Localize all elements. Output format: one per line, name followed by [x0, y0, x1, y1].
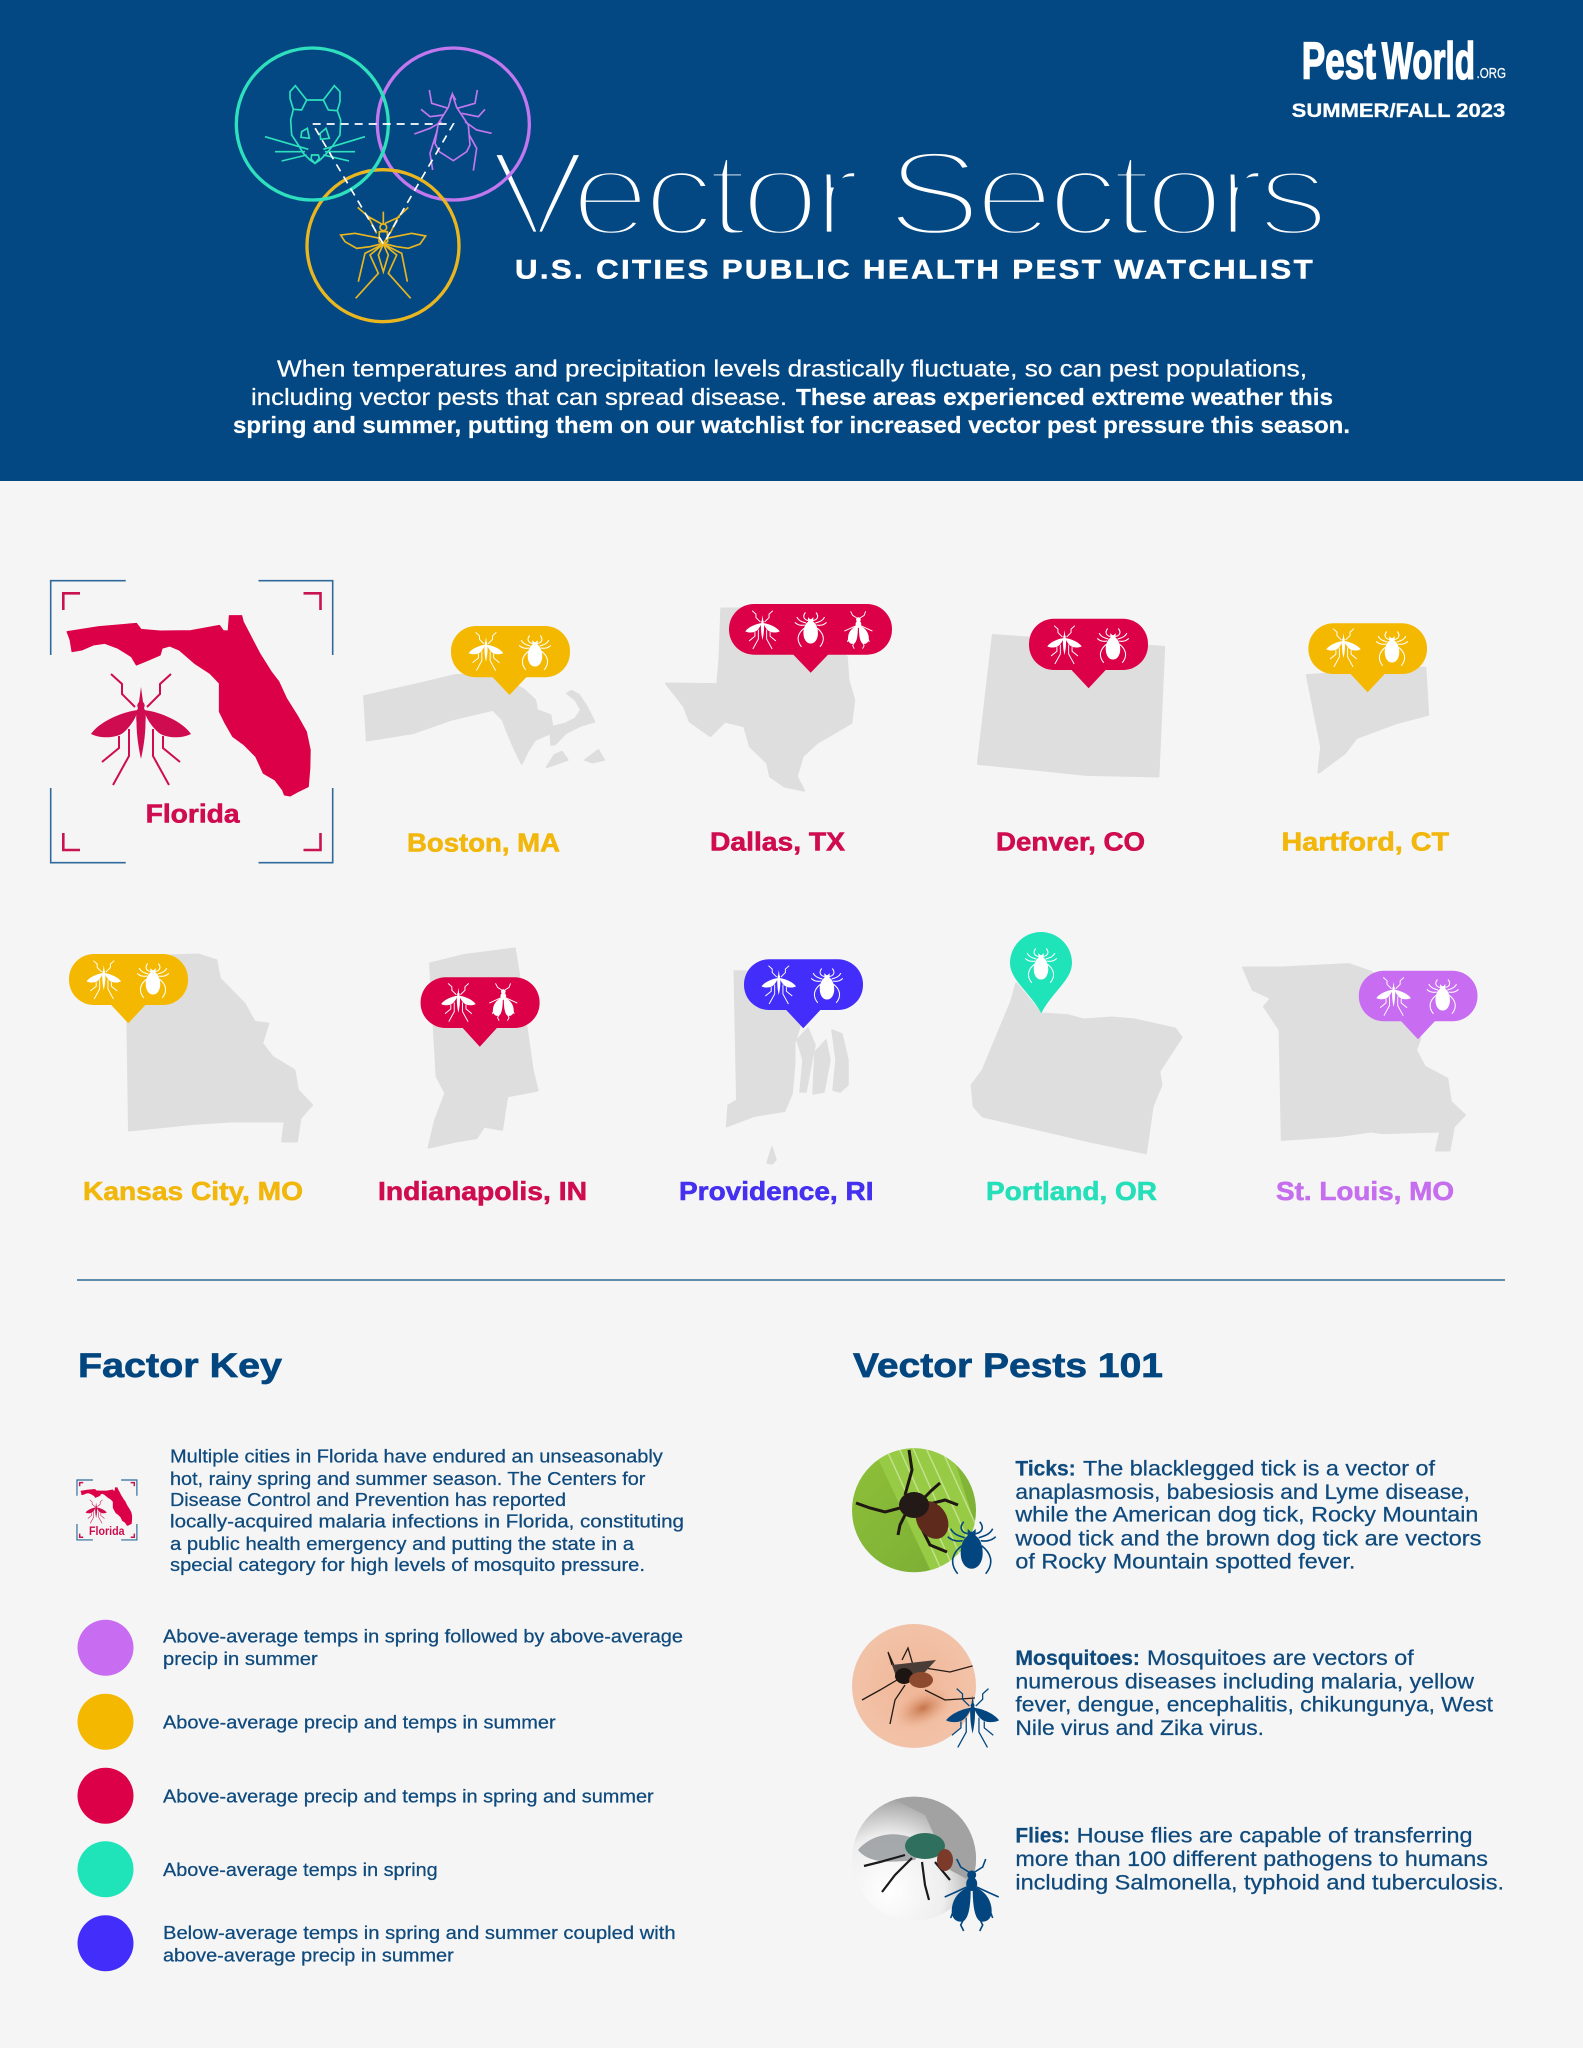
city: Portland	[972, 932, 1181, 1206]
city: Boston	[364, 626, 604, 858]
icon: mosquito	[91, 674, 191, 785]
city: Hartford	[1282, 623, 1449, 857]
legend: red factor	[78, 1768, 654, 1824]
text: Florida explanation: hot, rainy spring and summer season. The Centers for	[170, 1469, 645, 1489]
legend: purple factor: Above-average temps in spring followed by above-average	[163, 1627, 683, 1647]
label: St. Louis: St. Louis, MO	[1276, 1176, 1454, 1206]
legend: purple factor	[78, 1620, 683, 1676]
label: Denver: Denver, CO	[996, 827, 1145, 857]
legend: yellow factor	[78, 1694, 556, 1750]
icon: mini Florida badge: Florida	[89, 1524, 125, 1538]
label: Hartford: Hartford, CT	[1282, 827, 1449, 857]
icon: rodent line art	[265, 86, 365, 163]
label: Indianapolis: Indianapolis, IN	[378, 1176, 587, 1206]
text: Florida explanation: locally-acquired malaria infections in Florida, constituting	[170, 1512, 684, 1532]
icon: three vector circles	[236, 48, 529, 322]
map: Indiana	[429, 948, 537, 1148]
intro paragraph: These areas experienced extreme weather this	[796, 384, 1333, 410]
legend: blue factor: Below-average temps in spring and summer coupled with	[163, 1923, 676, 1943]
text: Florida explanation	[170, 1447, 684, 1575]
text: Florida explanation: Multiple cities in Florida have endured an unseasonably	[170, 1447, 663, 1467]
logo: PestWorld.org: Pest	[1302, 32, 1376, 90]
panel: mosquitoes	[850, 1622, 1493, 1750]
text: flies: Flies:	[1015, 1825, 1070, 1848]
text: ticks: anaplasmosis, babesiosis and Lyme disease,	[1015, 1481, 1470, 1504]
pin: red mosquito and tick	[1029, 619, 1148, 688]
pin: red mosquito and fly	[421, 977, 540, 1047]
city: Providence	[679, 959, 874, 1206]
text: flies	[1015, 1825, 1504, 1894]
text: ticks	[1014, 1458, 1481, 1573]
panel: Florida highlight	[51, 581, 333, 863]
city: Dallas	[666, 604, 892, 857]
legend: red factor: Above-average precip and temps in spring and summer	[163, 1786, 654, 1806]
label: Dallas: Dallas, TX	[710, 827, 846, 857]
frame corners	[51, 581, 333, 863]
intro paragraph: When temperatures and precipitation levels drastically fluctuate, so can pest populations,	[277, 356, 1307, 382]
logo: PestWorld.org: .ORG	[1476, 65, 1506, 82]
icon: mini Florida badge	[77, 1480, 137, 1540]
heading: Vector Pests 101: Vector Pests 101	[853, 1347, 1163, 1385]
text: mosquitoes: Mosquitoes:	[1015, 1647, 1140, 1670]
text: flies: more than 100 different pathogens to humans	[1015, 1848, 1488, 1871]
text: flies: House flies are capable of transferring	[1077, 1825, 1473, 1848]
legend: purple factor: precip in summer	[163, 1649, 318, 1669]
city: St. Louis	[1243, 964, 1478, 1206]
icon: tick	[948, 1522, 996, 1574]
label: Providence: Providence, RI	[679, 1176, 874, 1206]
text: mosquitoes: Nile virus and Zika virus.	[1015, 1717, 1264, 1740]
text: mosquitoes: fever, dengue, encephalitis, chikungunya, West	[1015, 1694, 1493, 1717]
photo: tick on leaf	[852, 1448, 976, 1572]
title: Vector Sectors	[490, 125, 1325, 261]
label: Boston: Boston, MA	[407, 828, 560, 858]
text: ticks: Ticks:	[1015, 1458, 1076, 1481]
map: Missouri	[127, 954, 312, 1142]
map: Florida	[67, 616, 310, 796]
edition date: SUMMER/FALL 2023	[1292, 100, 1505, 122]
pin: yellow mosquito and tick	[451, 626, 570, 695]
label: Kansas City: Kansas City, MO	[83, 1176, 303, 1206]
map: Missouri	[1243, 964, 1465, 1151]
logo: PestWorld.org	[1302, 32, 1506, 90]
pin: blue mosquito and tick	[744, 959, 863, 1028]
intro paragraph: spring and summer, putting them on our watchlist for increased vector pest pressure this season.	[233, 412, 1350, 438]
icon: fly	[945, 1859, 999, 1931]
legend: teal factor	[78, 1841, 438, 1897]
text: mosquitoes	[1015, 1647, 1493, 1740]
pin: red mosquito, tick and fly	[729, 604, 892, 673]
map: Connecticut	[1307, 667, 1428, 773]
text: ticks: The blacklegged tick is a vector of	[1083, 1458, 1435, 1481]
intro paragraph	[233, 356, 1350, 438]
text: Florida explanation: a public health emergency and putting the state in a	[170, 1534, 635, 1554]
text: ticks: of Rocky Mountain spotted fever.	[1015, 1550, 1355, 1573]
logo: PestWorld.org: World	[1382, 32, 1475, 90]
map: Colorado	[978, 635, 1164, 777]
text: flies: including Salmonella, typhoid and tuberculosis.	[1015, 1871, 1504, 1894]
city: Indianapolis	[378, 948, 587, 1206]
legend: blue factor	[78, 1915, 676, 1971]
pin: yellow mosquito and tick	[1308, 623, 1427, 692]
header panel	[0, 0, 1583, 481]
intro paragraph: including vector pests that can spread disease.	[251, 384, 787, 410]
pin: yellow mosquito and tick	[69, 954, 188, 1023]
icon: mosquito line art	[341, 207, 426, 298]
map: Rhode Island	[726, 970, 848, 1164]
legend: blue factor: above-average precip in summer	[163, 1946, 454, 1966]
label: Portland: Portland, OR	[986, 1176, 1157, 1206]
text: Florida explanation: Disease Control and Prevention has reported	[170, 1490, 566, 1510]
text: Florida explanation: special category for high levels of mosquito pressure.	[170, 1555, 645, 1575]
city: Kansas City	[69, 954, 312, 1206]
text: ticks: wood tick and the brown dog tick are vectors	[1014, 1528, 1481, 1551]
city: Denver	[978, 619, 1164, 857]
panel: ticks	[850, 1446, 1481, 1580]
heading: Factor Key: Factor Key	[78, 1347, 282, 1385]
panel: flies	[850, 1795, 1504, 1931]
photo: mosquito on skin	[850, 1622, 978, 1750]
photo: house fly	[854, 1796, 976, 1914]
pin: purple mosquito and tick	[1359, 971, 1478, 1039]
factor key: Florida entry	[77, 1447, 684, 1575]
subtitle: U.S. CITIES PUBLIC HEALTH PEST WATCHLIST	[515, 254, 1315, 284]
legend: teal factor: Above-average temps in spring	[163, 1860, 438, 1880]
map: Oregon	[972, 983, 1181, 1153]
text: ticks: while the American dog tick, Rocky Mountain	[1014, 1504, 1478, 1527]
pin: teal tick	[1010, 932, 1072, 1013]
icon: mosquito	[946, 1689, 999, 1747]
map: Massachusetts	[364, 673, 604, 767]
icon: tick line art	[414, 90, 492, 171]
map: Texas	[666, 608, 854, 791]
text: mosquitoes: Mosquitoes are vectors of	[1147, 1647, 1414, 1670]
label: Florida: Florida	[146, 799, 240, 829]
text: mosquitoes: numerous diseases including malaria, yellow	[1015, 1670, 1475, 1693]
legend: yellow factor: Above-average precip and temps in summer	[163, 1712, 556, 1732]
